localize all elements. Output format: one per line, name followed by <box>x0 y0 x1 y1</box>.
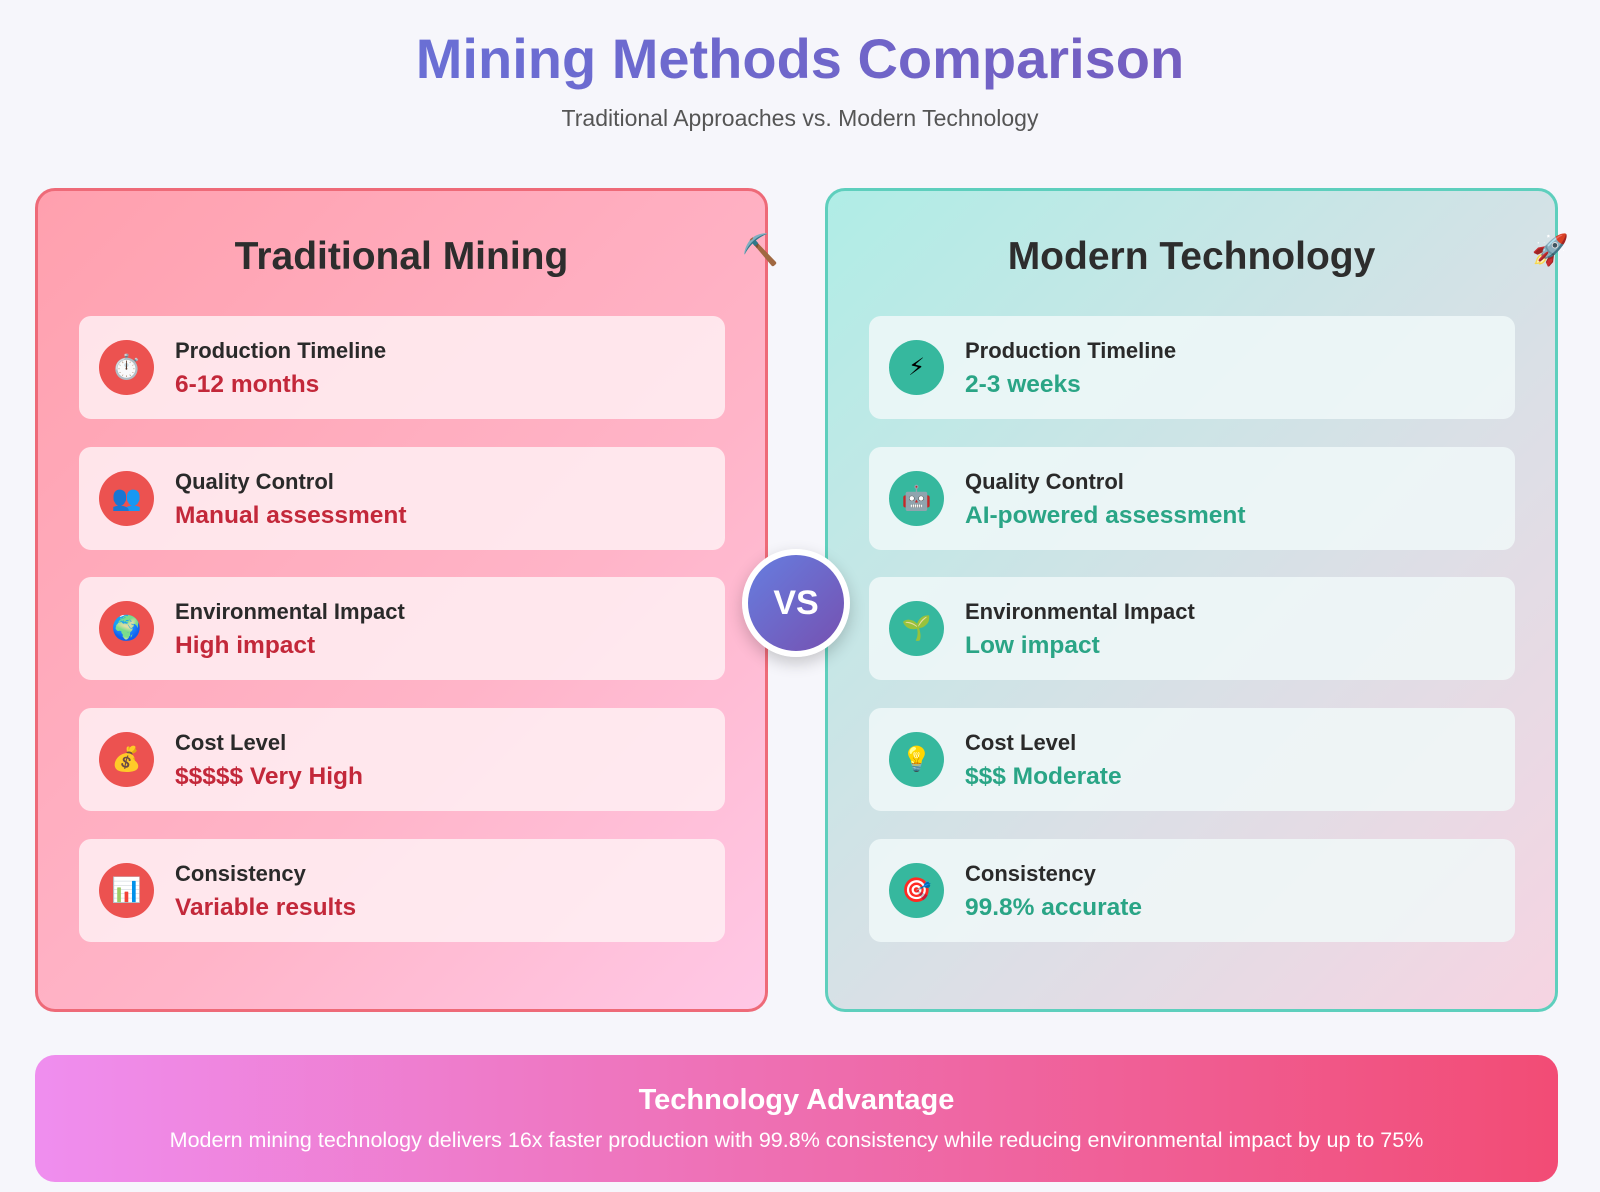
row: quality control: 🤖 <box>902 485 931 512</box>
row: quality control: 👥 <box>112 485 141 512</box>
row: cost level: 💡 <box>902 746 931 773</box>
title: Mining Methods Comparison <box>416 27 1184 90</box>
row: production timeline <box>869 316 1515 419</box>
row: environmental impact: Low impact <box>965 632 1100 659</box>
panel: modern technology <box>825 188 1558 1012</box>
row: environmental impact: 🌱 <box>902 615 931 642</box>
icon: pickaxe: ⛏️ <box>742 234 779 267</box>
vs badge: VS <box>773 584 819 622</box>
panel: traditional mining <box>35 188 768 1012</box>
row: cost level: 💰 <box>112 746 141 773</box>
row: environmental impact <box>869 577 1515 680</box>
banner: technology advantage: Modern mining technology delivers 16x faster production with 99.8% consistency while reducing environmental impact by up to 75% <box>170 1128 1423 1152</box>
heading: traditional: Traditional Mining <box>235 235 568 278</box>
banner: technology advantage <box>35 1055 1558 1182</box>
row: consistency: 🎯 <box>902 877 931 904</box>
row: production timeline: ⏱️ <box>112 354 141 381</box>
banner: technology advantage: Technology Advantage <box>639 1084 954 1116</box>
title <box>0 26 1600 91</box>
row: quality control: Quality Control <box>175 469 334 494</box>
row: environmental impact: Environmental Impact <box>965 599 1195 624</box>
row: environmental impact <box>79 577 725 680</box>
subtitle: Traditional Approaches vs. Modern Technology <box>562 105 1038 131</box>
row: consistency: Variable results <box>175 894 356 921</box>
row: production timeline: ⚡ <box>908 354 925 381</box>
row: environmental impact: Environmental Impact <box>175 599 405 624</box>
row: cost level <box>869 708 1515 811</box>
row: quality control <box>869 447 1515 550</box>
row: consistency: 📊 <box>112 877 141 904</box>
row: environmental impact: High impact <box>175 632 315 659</box>
row: environmental impact: 🌍 <box>112 615 141 642</box>
row: consistency: Consistency <box>965 861 1096 886</box>
row: consistency: Consistency <box>175 861 306 886</box>
row: quality control: AI-powered assessment <box>965 502 1246 529</box>
row: cost level <box>79 708 725 811</box>
icon: rocket: 🚀 <box>1532 234 1569 267</box>
row: cost level: $$$ Moderate <box>965 763 1122 790</box>
row: consistency: 99.8% accurate <box>965 894 1142 921</box>
heading: modern: Modern Technology <box>1008 235 1375 278</box>
row: production timeline: Production Timeline <box>965 338 1176 363</box>
row: quality control <box>79 447 725 550</box>
row: production timeline: Production Timeline <box>175 338 386 363</box>
row: quality control: Quality Control <box>965 469 1124 494</box>
row: quality control: Manual assessment <box>175 502 406 529</box>
row: consistency <box>869 839 1515 942</box>
row: production timeline: 6-12 months <box>175 371 319 398</box>
row: cost level: Cost Level <box>965 730 1076 755</box>
vs badge <box>742 549 850 657</box>
row: production timeline: 2-3 weeks <box>965 371 1081 398</box>
row: consistency <box>79 839 725 942</box>
row: production timeline <box>79 316 725 419</box>
row: cost level: Cost Level <box>175 730 286 755</box>
row: cost level: $$$$$ Very High <box>175 763 363 790</box>
